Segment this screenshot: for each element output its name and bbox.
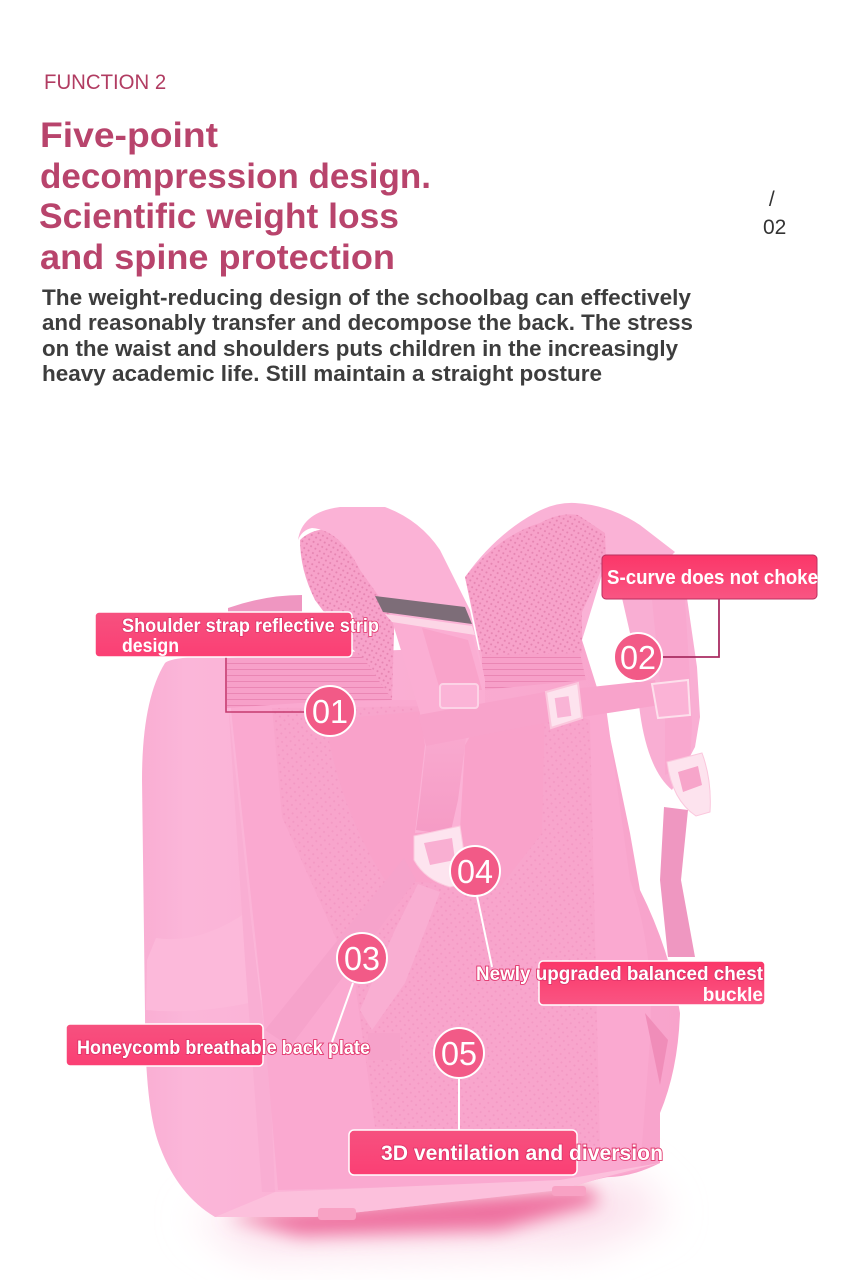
far strap webbing [652,600,692,775]
lumbar cushion [325,700,545,887]
reflective trim [385,614,475,635]
callout 5: 3D ventilation and diversion [381,1142,663,1165]
body text: heavy academic life. Still maintain a straight posture [42,361,602,386]
callout 1: design [122,636,179,657]
mesh back plate [272,705,600,1147]
adjuster far [652,680,690,718]
badge 05: 05 [441,1035,477,1072]
far shoulder arch [465,503,675,650]
leader lines [226,598,719,1130]
lower strap A [265,858,416,1047]
eyebrow: function 2: FUNCTION 2 [44,71,166,94]
back panel [230,700,651,1190]
lower side tab [368,1033,400,1060]
adjuster top [440,684,478,708]
callout 5 [349,1130,663,1175]
top webbing band right [482,653,586,690]
top webbing band left [227,650,392,708]
side seam shade [228,700,275,1192]
near strap mesh lining [300,529,395,700]
callout 3: Honeycomb breathable back plate [77,1038,370,1059]
page number [763,188,786,239]
side pocket [146,910,262,1011]
page number: 02 [763,216,786,239]
callout 2: S-curve does not choke [607,567,818,589]
ground shadow [190,1175,670,1255]
near strap shade [390,614,485,745]
callout 4: Newly upgraded balanced chest [476,964,764,985]
callout 2 [602,555,818,599]
badge 04: 04 [457,853,493,890]
bottom panel [215,1163,660,1217]
feet [318,1208,356,1220]
strap webbing upper [422,628,482,690]
callout 1 [95,612,379,657]
body text [42,285,693,386]
page number: / [769,188,775,211]
callout 4 [476,961,765,1006]
lower strap B [360,884,440,1030]
badge 03 [337,933,387,983]
badge 03: 03 [344,940,380,977]
title [39,116,431,277]
far arch mesh [465,514,606,655]
callout 4: buckle [703,985,763,1006]
far pocket trim [645,1013,668,1085]
badge 05 [434,1028,484,1078]
near shoulder strap [298,507,485,833]
title: Scientific weight loss [39,197,399,236]
chest buckle [546,683,582,728]
title: Five-point [40,116,218,155]
callout 1: Shoulder strap reflective strip [122,616,379,637]
pack top zip [228,595,302,660]
backpack [142,503,710,1220]
title: decompression design. [40,157,431,196]
reflective strip [375,596,472,624]
near buckle [414,826,472,887]
badge 02: 02 [620,639,656,676]
far buckle [667,753,710,816]
pack body [142,618,680,1217]
chest strap [418,680,660,746]
badge 02 [614,633,662,681]
strap webbing lower [416,738,466,835]
far shoulder strap lower [622,598,700,790]
body text: on the waist and shoulders puts children in the increasingly [42,336,678,361]
chest buckle centre [555,696,571,718]
lower far band [660,807,695,957]
body text: The weight-reducing design of the schoolbag can effectively [42,285,691,310]
badge 01: 01 [312,693,348,730]
body text: and reasonably transfer and decompose the back. The stress [42,310,693,335]
callout 3 [66,1024,370,1066]
badge 01 [305,686,355,736]
title: and spine protection [40,238,395,277]
badge 04 [450,846,500,896]
